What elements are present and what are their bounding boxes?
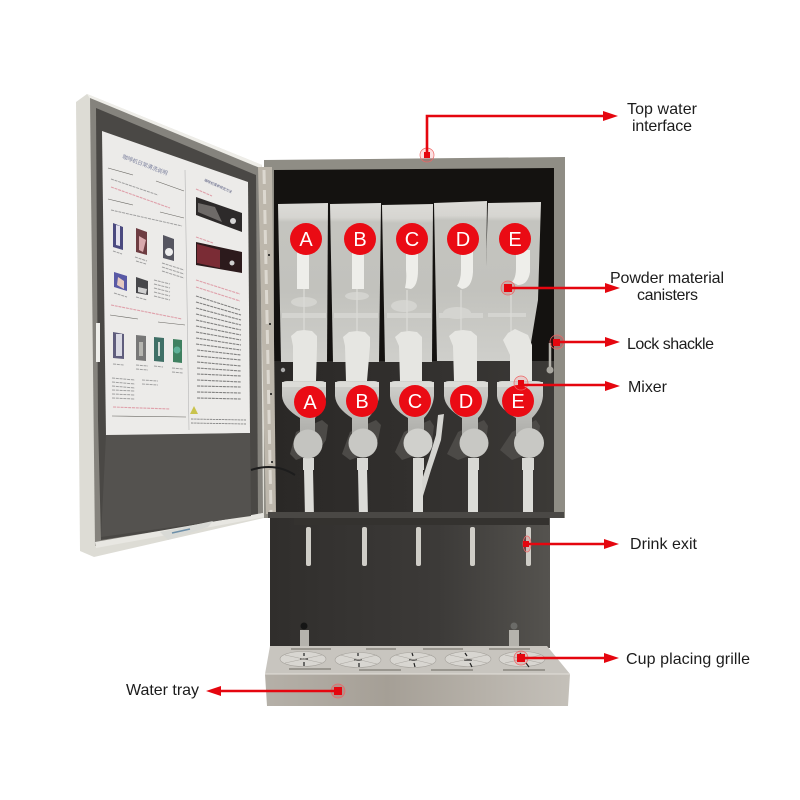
badge lower C: C — [408, 391, 422, 413]
badge lower E — [502, 385, 534, 417]
mixer D — [444, 381, 488, 517]
door lower plate — [101, 433, 251, 537]
outlet B — [343, 331, 370, 381]
mixer C — [390, 381, 444, 517]
door inner frame — [90, 98, 263, 546]
arrow: top water interface — [420, 111, 618, 162]
label: top water interface: interface — [632, 118, 692, 135]
callout: lock shackle — [550, 335, 714, 353]
mixers and valves — [282, 381, 544, 517]
arrow: mixer — [514, 376, 620, 391]
outlet D — [449, 330, 477, 381]
badge upper C: C — [405, 229, 419, 251]
label: lock shackle: Lock shackle — [627, 336, 714, 353]
mixer badges — [294, 385, 534, 418]
callout: powder material canisters — [501, 270, 724, 304]
mixer E — [497, 381, 544, 517]
powder shadows — [282, 292, 526, 319]
badge upper D — [447, 223, 479, 255]
callout: water tray — [126, 682, 345, 699]
hose C — [422, 414, 444, 496]
canister E — [483, 202, 541, 361]
label: water tray: Water tray — [126, 682, 199, 699]
canister badges — [290, 223, 531, 255]
arrow: drink exit — [523, 536, 619, 552]
tray top surface — [265, 646, 570, 674]
callout: mixer — [514, 376, 668, 396]
badge lower A — [294, 386, 326, 418]
machine body — [264, 157, 565, 518]
cup placing grille — [280, 649, 545, 670]
arrow: water tray — [206, 684, 345, 698]
badge lower C — [399, 385, 431, 417]
badge upper B: B — [353, 229, 367, 251]
badge upper A — [290, 223, 322, 255]
badge upper B — [344, 223, 376, 255]
badge upper D: D — [456, 229, 470, 251]
mixer A — [282, 381, 326, 517]
label: powder material canisters: canisters — [637, 287, 698, 304]
sheet thumbnails — [113, 197, 242, 363]
mixer B — [335, 381, 379, 517]
badge upper A: A — [299, 229, 313, 251]
canisters — [278, 201, 541, 362]
badge lower D: D — [459, 391, 473, 413]
open door — [76, 94, 268, 557]
badge lower B: B — [355, 391, 369, 413]
badge lower A: A — [303, 392, 317, 414]
hinge side cable — [251, 467, 295, 475]
label: powder material canisters: Powder material — [610, 270, 724, 287]
canister D — [434, 201, 487, 361]
label: drink exit: Drink exit — [630, 536, 698, 553]
callout: cup placing grille — [514, 651, 750, 668]
callout: drink exit — [523, 536, 698, 553]
dense text block — [196, 296, 241, 399]
canister inner tubes — [297, 250, 530, 289]
shelf bar — [268, 512, 564, 525]
badge lower D — [450, 385, 482, 417]
badge upper C — [396, 223, 428, 255]
outlet C — [395, 331, 422, 381]
water tray — [265, 646, 570, 706]
drink exit rods — [306, 527, 531, 566]
canister A — [278, 203, 328, 362]
label: mixer: Mixer — [628, 379, 668, 396]
badge upper E — [499, 223, 531, 255]
sheet divider — [185, 170, 189, 430]
canister B — [330, 203, 381, 362]
door latch strip — [96, 323, 100, 362]
arrow: powder canisters — [501, 281, 620, 295]
lock shackle — [546, 343, 554, 374]
outlet E — [503, 329, 532, 381]
tray front face — [265, 674, 570, 706]
badge lower B — [346, 385, 378, 417]
sheet title right: 咖啡机清单规定方法 — [204, 177, 234, 194]
tray brackets — [300, 622, 519, 646]
canister outlets — [291, 329, 532, 381]
sheet title left: 咖啡机日常清洗说明 — [121, 152, 169, 177]
machine back panel — [270, 518, 550, 648]
door hinge — [251, 167, 295, 514]
canister C — [382, 204, 433, 362]
warning note — [190, 406, 246, 424]
label: cup placing grille: Cup placing grille — [626, 651, 750, 668]
label: top water interface: Top water — [627, 101, 698, 118]
outlet A — [291, 330, 317, 381]
body outer casing — [264, 157, 565, 518]
brackets — [290, 420, 540, 460]
callout: top water interface — [420, 101, 698, 162]
instruction sheet — [102, 131, 250, 436]
badge upper E: E — [508, 229, 522, 251]
arrow: lock shackle — [550, 335, 620, 349]
door outer frame — [76, 94, 268, 557]
body interior — [274, 168, 554, 512]
arrow: cup placing grille — [514, 651, 619, 665]
badge lower E: E — [511, 391, 525, 413]
paper in door pocket — [160, 521, 213, 540]
